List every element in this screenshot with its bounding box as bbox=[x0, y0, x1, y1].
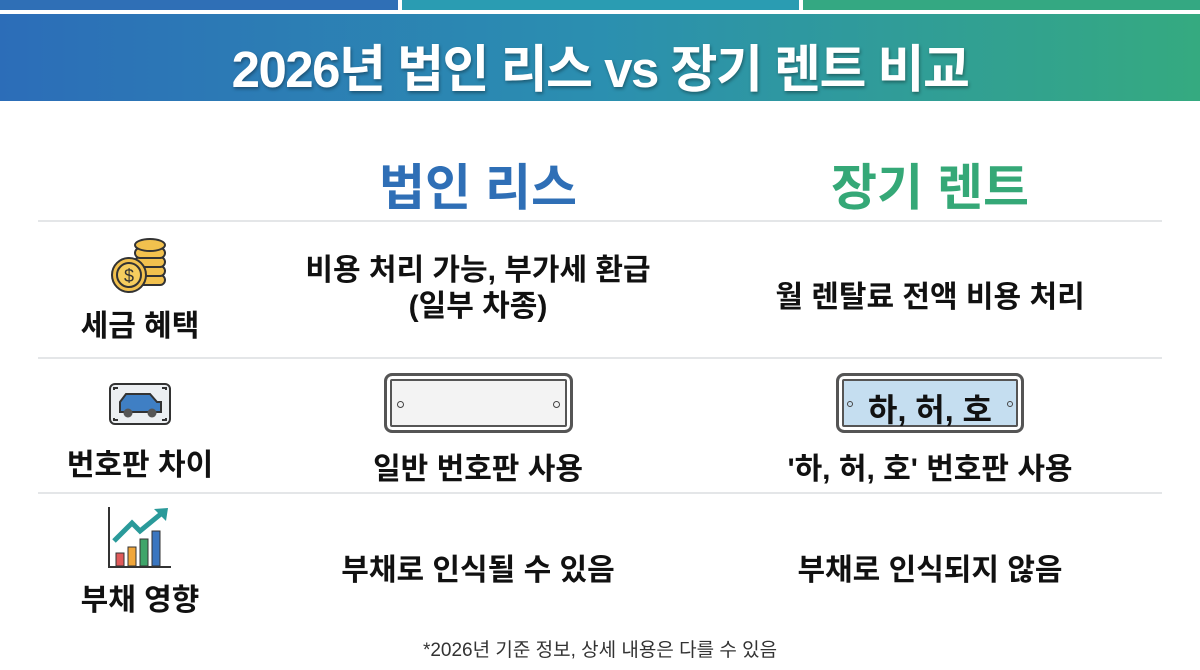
row label: tax: 세금 혜택 bbox=[81, 310, 199, 343]
tax: lease text: 비용 처리 가능, 부가세 환급 bbox=[305, 254, 651, 287]
top color bars bbox=[0, 0, 1200, 10]
plate: lease text: 일반 번호판 사용 bbox=[373, 453, 583, 486]
footnote: *2026년 기준 정보, 상세 내용은 다를 수 있음 bbox=[423, 640, 777, 661]
title banner: 2026년 법인 리스 vs 장기 렌트 비교 bbox=[232, 41, 968, 98]
debt: rent text: 부채로 인식되지 않음 bbox=[797, 554, 1063, 587]
row label: debt bbox=[81, 507, 199, 617]
icon: chart bbox=[108, 507, 171, 568]
column heading: rent: 장기 렌트 bbox=[831, 160, 1029, 216]
plate: lease blank plate bbox=[384, 373, 573, 433]
title banner bbox=[0, 14, 1200, 101]
column heading: lease: 법인 리스 bbox=[379, 160, 577, 216]
tax: lease text: (일부 차종) bbox=[409, 290, 547, 323]
debt: lease text: 부채로 인식될 수 있음 bbox=[341, 554, 615, 587]
tax: rent text: 월 렌탈료 전액 비용 처리 bbox=[775, 281, 1085, 314]
plate: rent text: '하, 허, 호' 번호판 사용 bbox=[787, 453, 1073, 486]
row label: plate: 번호판 차이 bbox=[67, 449, 213, 482]
plate: rent plate: 하, 허, 호 bbox=[868, 392, 992, 428]
row label: tax bbox=[81, 238, 199, 343]
tax: lease text bbox=[305, 254, 651, 323]
icon: car plate bbox=[109, 383, 171, 425]
icon: coins: $ bbox=[124, 266, 134, 286]
row label: plate bbox=[67, 383, 213, 482]
row label: debt: 부채 영향 bbox=[81, 584, 199, 617]
plate: rent plate bbox=[836, 373, 1024, 433]
icon: coins bbox=[111, 238, 166, 293]
